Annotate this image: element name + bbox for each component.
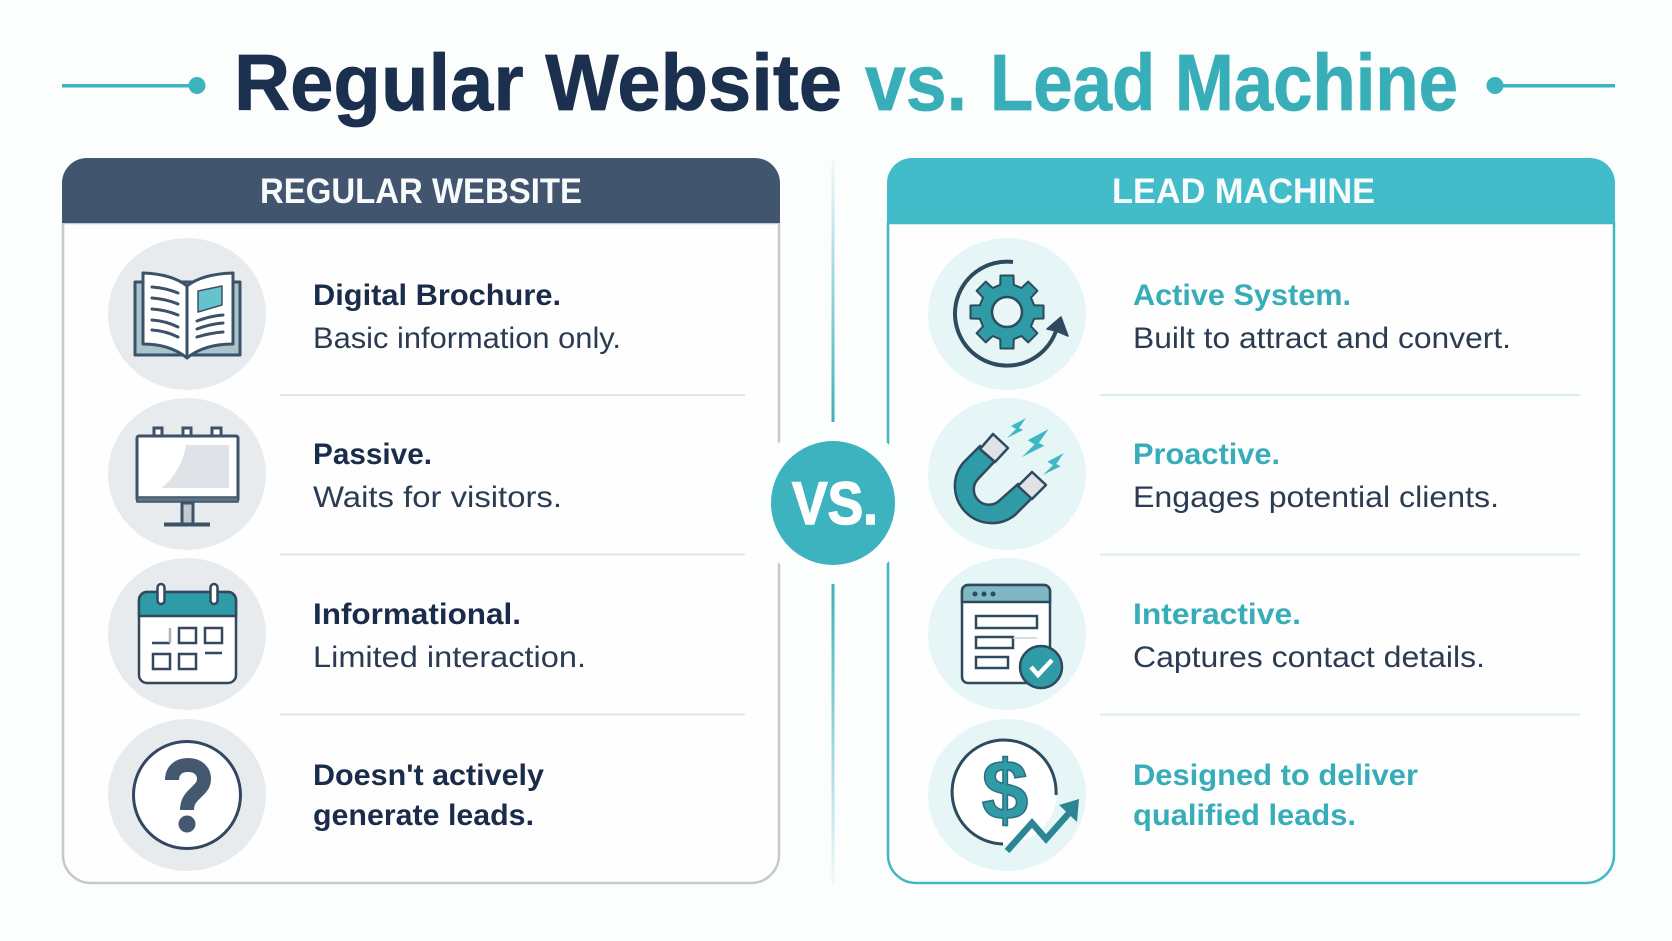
panel header: regular website <box>62 158 780 223</box>
panel header: lead machine <box>887 158 1615 223</box>
text: active system <box>1133 279 1511 355</box>
icon circle: proactive <box>928 398 1086 550</box>
icon: form window with check <box>962 585 1062 688</box>
vs badge: VS. <box>792 470 878 537</box>
text: informational: Limited interaction. <box>313 641 586 674</box>
text: proactive <box>1133 438 1499 514</box>
title: Regular Website <box>234 38 842 127</box>
text: designed to deliver qualified leads: qualified leads. <box>1133 799 1356 832</box>
text: informational <box>313 598 586 674</box>
text: doesn't actively generate leads <box>313 759 544 832</box>
text: interactive: Interactive. <box>1133 598 1301 631</box>
title accent line right <box>1486 77 1615 94</box>
text: digital brochure: Digital Brochure. <box>313 279 561 312</box>
panel header: regular website: REGULAR WEBSITE <box>260 172 582 211</box>
icon: dollar with growth arrow: $ <box>982 743 1028 837</box>
text: active system: Active System. <box>1133 279 1351 312</box>
text: digital brochure: Basic information only. <box>313 322 621 355</box>
icon: billboard <box>137 428 238 524</box>
panel: regular website <box>62 158 780 883</box>
row dividers <box>1100 394 1580 716</box>
text: passive <box>313 438 562 514</box>
text: passive: Passive. <box>313 438 432 471</box>
text: active system: Built to attract and convert. <box>1133 322 1511 355</box>
text: digital brochure <box>313 279 621 355</box>
title: Lead Machine <box>990 38 1458 127</box>
title <box>234 38 1458 127</box>
icon circle: question <box>108 719 266 871</box>
icon: dollar with growth arrow <box>952 740 1079 851</box>
text: proactive: Engages potential clients. <box>1133 481 1499 514</box>
icon: open book <box>135 273 240 358</box>
text: proactive: Proactive. <box>1133 438 1280 471</box>
icon circle: interactive <box>928 558 1086 710</box>
icon circle: qualified leads <box>928 719 1086 871</box>
panel: lead machine <box>887 158 1615 883</box>
icon circle: active system <box>928 238 1086 390</box>
vs badge <box>752 422 914 584</box>
text: informational: Informational. <box>313 598 521 631</box>
title accent line left <box>62 77 206 94</box>
row dividers <box>280 394 745 716</box>
icon circle: billboard <box>108 398 266 550</box>
panel header: lead machine: LEAD MACHINE <box>1112 172 1375 211</box>
text: designed to deliver qualified leads <box>1133 759 1418 832</box>
text: interactive <box>1133 598 1485 674</box>
icon circle: calendar <box>108 558 266 710</box>
text: designed to deliver qualified leads: Designed to deliver <box>1133 759 1418 792</box>
icon: calendar <box>139 584 236 683</box>
icon: magnet <box>955 418 1064 523</box>
text: passive: Waits for visitors. <box>313 481 562 514</box>
center divider <box>832 160 834 885</box>
icon circle: brochure <box>108 238 266 390</box>
icon: question mark <box>134 742 240 848</box>
text: interactive: Captures contact details. <box>1133 641 1485 674</box>
title: vs. <box>865 38 967 127</box>
icon: gear with arrow <box>955 262 1068 366</box>
text: doesn't actively generate leads: generate leads. <box>313 799 534 832</box>
text: doesn't actively generate leads: Doesn't actively <box>313 759 544 792</box>
